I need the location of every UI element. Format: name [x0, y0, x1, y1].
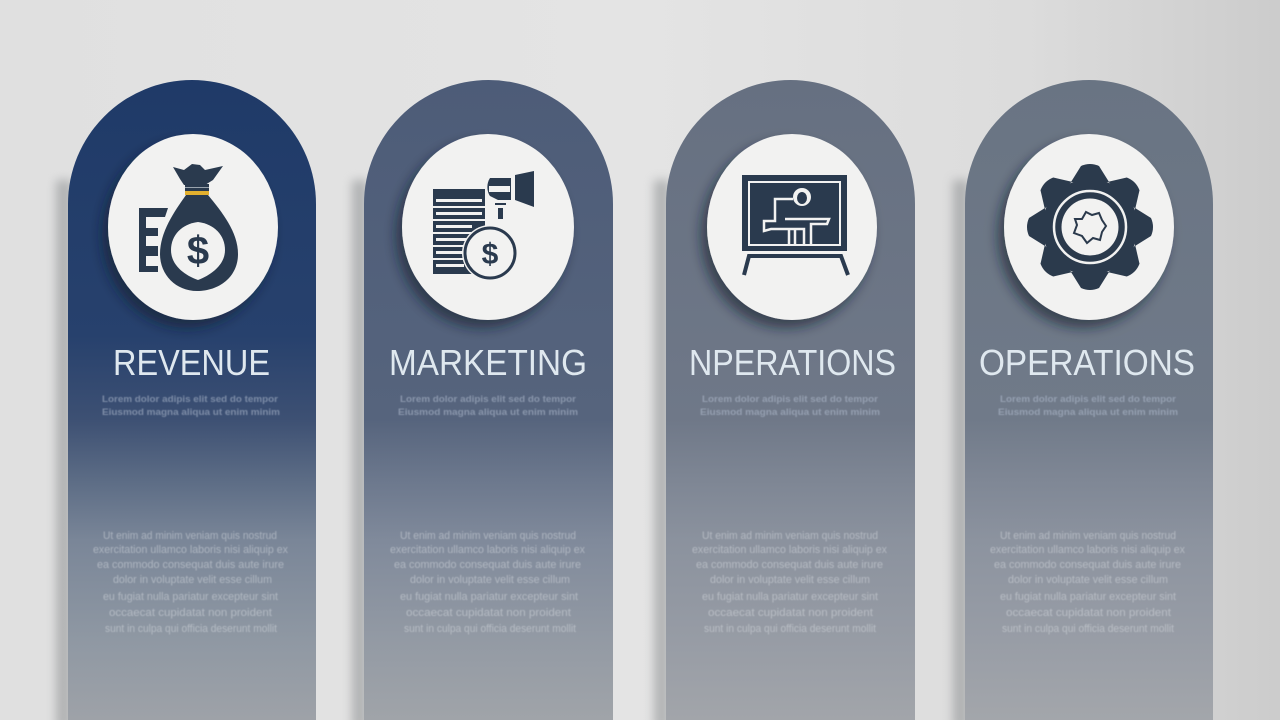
icon: money bag	[108, 134, 278, 320]
panel: marketing	[352, 80, 613, 720]
subtitle: marketing: Lorem dolor adipis elit sed do tempor	[400, 394, 577, 404]
body text: nperations: dolor in voluptate velit esse cillum	[710, 574, 870, 586]
subtitle: nperations: Eiusmod magna aliqua ut enim minim	[700, 407, 880, 417]
body text: marketing: occaecat cupidatat non proident	[406, 607, 571, 619]
body text: nperations: exercitation ullamco laboris nisi aliquip ex	[692, 544, 887, 556]
icon: presenter at screen	[707, 134, 877, 320]
body text: revenue: occaecat cupidatat non proident	[109, 607, 272, 619]
body text: revenue: eu fugiat nulla pariatur excepteur sint	[103, 591, 278, 603]
heading: marketing: MARKETING	[389, 342, 587, 383]
body text: nperations: Ut enim ad minim veniam quis nostrud	[702, 530, 878, 542]
icon: marketing megaphone and coin	[402, 134, 574, 320]
body text: operations: occaecat cupidatat non proident	[1006, 607, 1171, 619]
body text: marketing: sunt in culpa qui officia deserunt mollit	[404, 623, 576, 635]
icon: gear	[1004, 134, 1174, 320]
panel: revenue	[56, 80, 316, 720]
body text: operations: eu fugiat nulla pariatur excepteur sint	[1000, 591, 1176, 603]
icon: marketing megaphone and coin: $	[482, 238, 499, 271]
subtitle: revenue: Lorem dolor adipis elit sed do tempor	[102, 394, 279, 404]
subtitle: revenue	[102, 394, 280, 417]
body text: nperations	[692, 530, 887, 635]
heading: operations: OPERATIONS	[979, 342, 1195, 383]
icon: money bag: $	[187, 229, 209, 273]
body text: marketing: ea commodo consequat duis aute irure	[394, 559, 581, 571]
body text: revenue	[93, 530, 288, 635]
subtitle: nperations: Lorem dolor adipis elit sed do tempor	[702, 394, 879, 404]
subtitle: nperations	[700, 394, 880, 417]
body text: revenue: dolor in voluptate velit esse cillum	[113, 574, 272, 586]
body text: nperations: sunt in culpa qui officia deserunt mollit	[704, 623, 876, 635]
subtitle: operations	[998, 394, 1178, 417]
body text: operations	[990, 530, 1185, 635]
body text: marketing	[390, 530, 585, 635]
body text: nperations: occaecat cupidatat non proident	[708, 607, 873, 619]
body text: operations: dolor in voluptate velit esse cillum	[1008, 574, 1168, 586]
subtitle: revenue: Eiusmod magna aliqua ut enim minim	[102, 407, 280, 417]
body text: marketing: exercitation ullamco laboris nisi aliquip ex	[390, 544, 585, 556]
body text: marketing: eu fugiat nulla pariatur excepteur sint	[400, 591, 578, 603]
body text: operations: sunt in culpa qui officia deserunt mollit	[1002, 623, 1174, 635]
body text: marketing: Ut enim ad minim veniam quis nostrud	[400, 530, 576, 542]
heading: nperations: NPERATIONS	[689, 342, 896, 383]
body text: operations: ea commodo consequat duis aute irure	[994, 559, 1181, 571]
body text: operations: Ut enim ad minim veniam quis nostrud	[1000, 530, 1176, 542]
body text: marketing: dolor in voluptate velit esse cillum	[410, 574, 570, 586]
subtitle: marketing	[398, 394, 578, 417]
panel: operations	[953, 80, 1213, 720]
body text: nperations: ea commodo consequat duis aute irure	[696, 559, 883, 571]
body text: nperations: eu fugiat nulla pariatur excepteur sint	[702, 591, 878, 603]
body text: revenue: sunt in culpa qui officia deserunt mollit	[105, 623, 277, 635]
body text: operations: exercitation ullamco laboris nisi aliquip ex	[990, 544, 1185, 556]
heading: revenue: REVENUE	[113, 342, 270, 383]
subtitle: operations: Eiusmod magna aliqua ut enim minim	[998, 407, 1178, 417]
body text: revenue: ea commodo consequat duis aute irure	[97, 559, 284, 571]
subtitle: operations: Lorem dolor adipis elit sed do tempor	[1000, 394, 1177, 404]
subtitle: marketing: Eiusmod magna aliqua ut enim minim	[398, 407, 578, 417]
panel: nperations	[654, 80, 915, 720]
body text: revenue: Ut enim ad minim veniam quis nostrud	[103, 530, 277, 542]
body text: revenue: exercitation ullamco laboris nisi aliquip ex	[93, 544, 288, 556]
